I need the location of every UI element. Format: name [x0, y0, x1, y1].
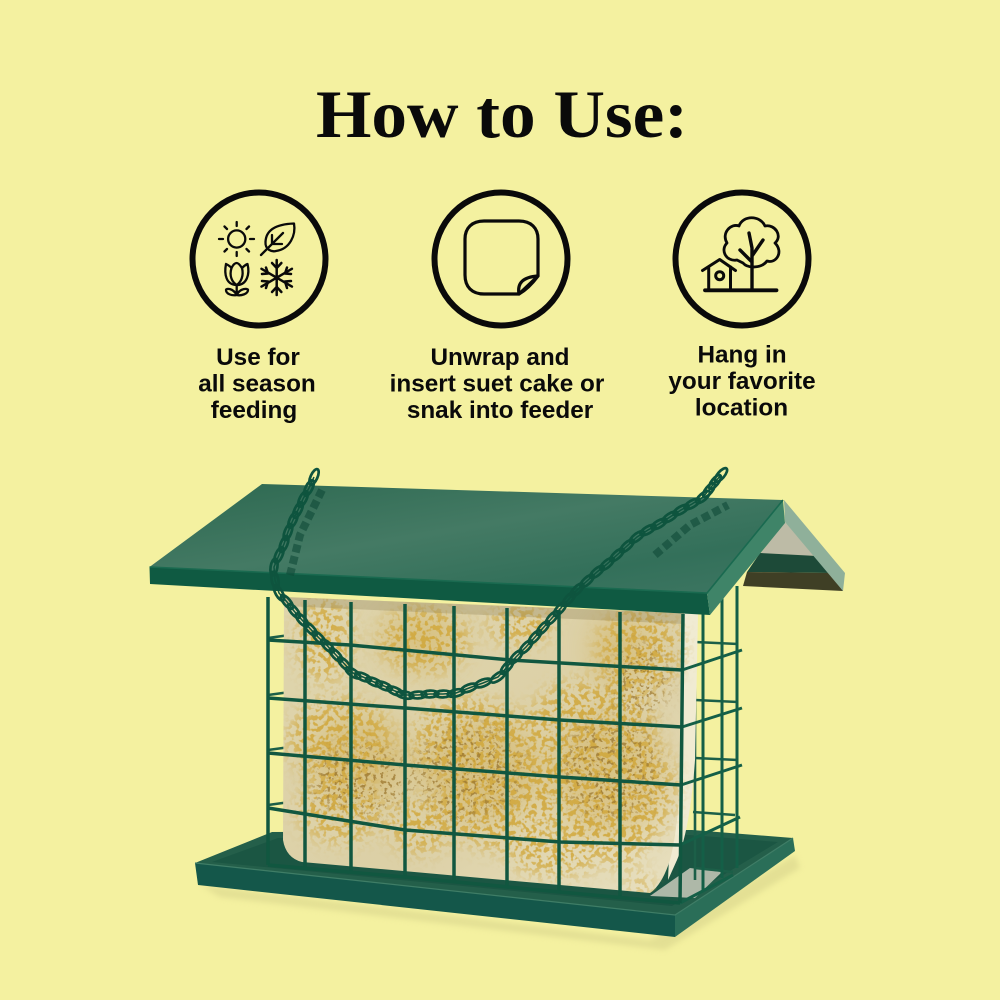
roof: [150, 484, 845, 615]
label: step 3: location: [695, 394, 788, 422]
seed speckles: [288, 598, 682, 895]
icon: four seasons: [192, 192, 326, 326]
label: step 3: Hang in: [697, 342, 787, 368]
roof underside: [743, 522, 843, 591]
tray: [195, 830, 795, 937]
title: How to Use:: [316, 76, 688, 152]
label: step 3: your favorite: [668, 368, 816, 395]
floor shadow: [200, 855, 800, 950]
label: step 1: Use for: [216, 344, 300, 371]
step 3: hang in favorite location: [668, 192, 816, 422]
suet feeder photo illustration: [150, 475, 845, 950]
icon: peeling sticker: [434, 192, 568, 326]
gold haze under the seeds: [310, 610, 665, 835]
front cage: [268, 597, 683, 903]
label: step 1: all season: [198, 370, 316, 398]
brown seed fragments: [310, 644, 668, 822]
chain shadow on roof: [290, 490, 728, 575]
label: step 1: feeding: [211, 397, 297, 424]
label: step 2: snak into feeder: [407, 397, 594, 424]
step 1: all season feeding: [192, 192, 326, 424]
roof shadow on cake: [284, 597, 684, 624]
gold seed clumps: [288, 598, 682, 895]
right side cage: [680, 586, 742, 903]
label: step 2: insert suet cake or: [390, 370, 605, 398]
icon: tree and birdhouse: [676, 192, 808, 326]
hanging chain: [274, 475, 721, 695]
suet cake: [283, 597, 698, 895]
label: step 2: Unwrap and: [430, 344, 570, 371]
step 2: unwrap and insert: [390, 192, 605, 424]
rear cage wires: [268, 600, 738, 880]
